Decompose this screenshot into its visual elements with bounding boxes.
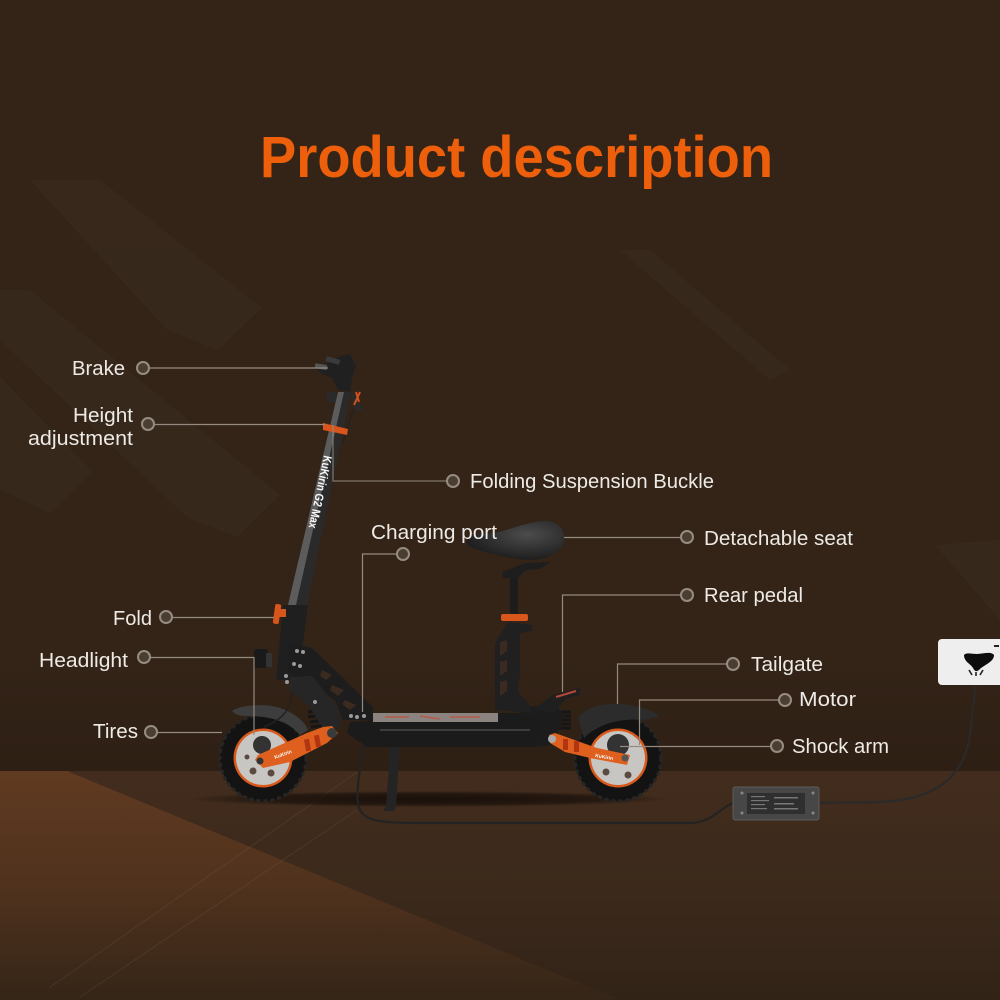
callout: Height adjustment: adjustment	[28, 428, 133, 450]
rear pedal	[532, 688, 580, 713]
floor	[0, 771, 1000, 1000]
callout: Detachable seat: Detachable seat	[704, 528, 853, 550]
fold knob	[273, 604, 286, 624]
callout: Charging port: Charging port	[371, 522, 497, 544]
right lever	[327, 390, 363, 443]
callout: Shock arm	[620, 736, 889, 758]
charger cable	[357, 742, 735, 823]
kickstand	[383, 741, 400, 811]
callout: Brake	[72, 358, 328, 380]
bracket cutouts	[320, 670, 356, 710]
callout: Charging port	[362, 522, 497, 712]
rear wheel	[575, 715, 661, 801]
callout: Brake: Brake	[72, 358, 125, 380]
callout: Shock arm: Shock arm	[792, 736, 889, 758]
rear spring	[556, 712, 571, 728]
front orange arm	[255, 726, 338, 768]
seat bracket cutouts	[500, 640, 507, 696]
seat mount	[502, 562, 550, 578]
detachable seat	[467, 521, 564, 560]
deck grip pattern	[385, 716, 480, 719]
steering tube	[276, 605, 308, 680]
rear orange arm	[548, 733, 630, 765]
callout: Fold	[113, 608, 274, 630]
power cable to outlet	[819, 680, 977, 803]
wall outlet	[938, 639, 1000, 685]
deck grip	[373, 713, 498, 722]
front fender	[232, 705, 308, 735]
callout: Detachable seat	[564, 528, 853, 550]
seat bracket	[495, 622, 532, 713]
bracket bolts	[284, 649, 366, 719]
fork arm	[290, 676, 340, 727]
rear pedal accent	[556, 691, 576, 697]
rear body	[510, 705, 565, 747]
callout: Folding Suspension Buckle	[333, 425, 714, 493]
callout: Tailgate	[618, 654, 823, 704]
stem	[288, 392, 351, 605]
callout: Motor	[640, 689, 856, 745]
background wall	[0, 0, 1000, 772]
power adapter	[733, 787, 819, 820]
front orange arm: KuKirin	[274, 749, 293, 761]
callout: Folding Suspension Buckle: Folding Suspension Buckle	[470, 471, 714, 493]
callout: Motor: Motor	[799, 689, 856, 711]
deck highlight	[380, 729, 530, 731]
ground shadow	[188, 791, 668, 807]
callout: Rear pedal	[562, 585, 803, 692]
stem brand text: KuKirin G2 Max	[306, 454, 335, 530]
floor light streaks	[49, 772, 357, 997]
callout: Tailgate: Tailgate	[751, 654, 823, 676]
seat clamp	[501, 614, 528, 621]
callout: Headlight	[39, 650, 254, 735]
callout: Height adjustment	[28, 405, 325, 450]
seat post	[510, 576, 518, 616]
title: Product description	[260, 125, 773, 190]
folding bracket	[288, 643, 373, 720]
callout: Tires: Tires	[93, 721, 138, 743]
height clamp	[323, 423, 348, 435]
callout: Height adjustment: Height	[73, 405, 133, 427]
callout: Fold: Fold	[113, 608, 152, 630]
rear orange arm: KuKirin	[595, 753, 613, 762]
callout: Headlight: Headlight	[39, 650, 128, 672]
callout: Tires	[93, 721, 222, 743]
rear fender	[578, 704, 660, 738]
brake lever	[315, 356, 340, 370]
handlebar head	[315, 354, 356, 392]
floor light beam	[0, 771, 620, 1000]
headlight	[254, 649, 272, 668]
deck	[347, 713, 546, 747]
front wheel	[220, 715, 306, 801]
background diagonal bands	[0, 180, 1000, 620]
callout: Rear pedal: Rear pedal	[704, 585, 803, 607]
front spring	[308, 710, 325, 727]
brake cable	[264, 690, 292, 727]
scooter	[220, 354, 661, 811]
